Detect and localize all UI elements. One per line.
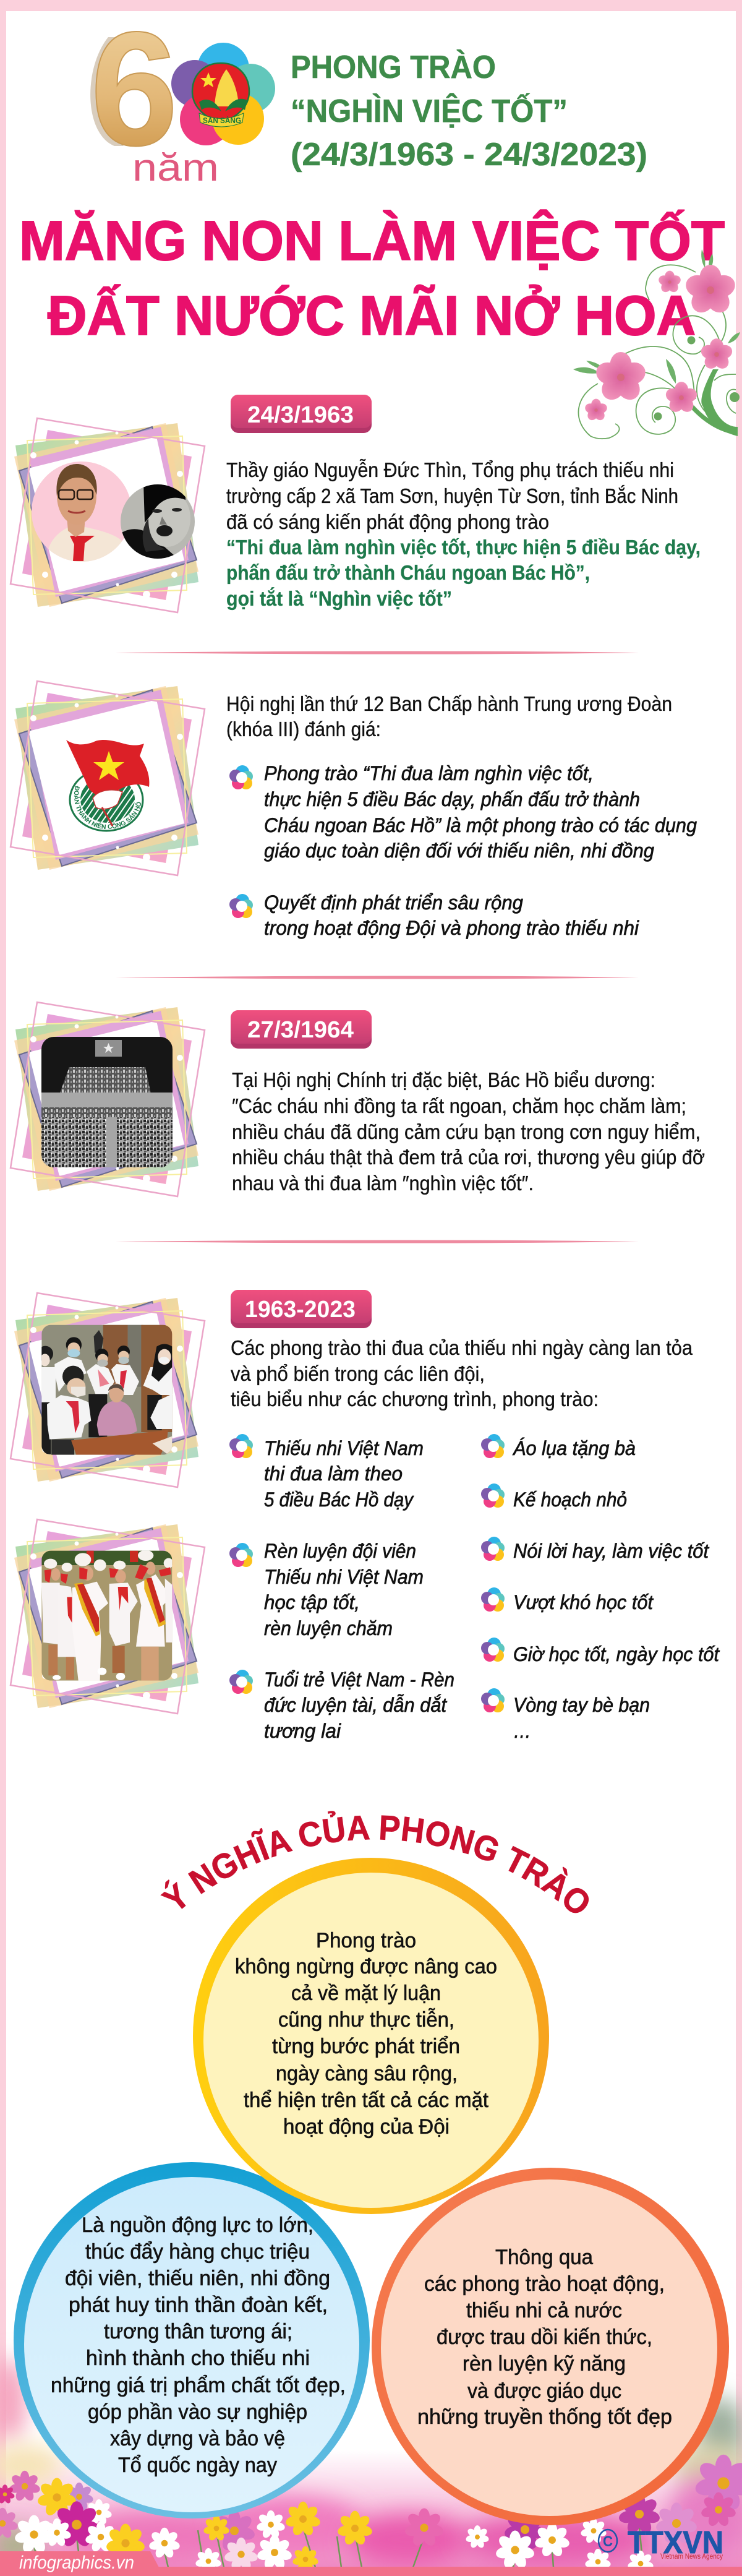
flower zero with badge [171, 43, 275, 145]
circle: yellow: thể hiện trên tất cả các mặt [244, 2089, 489, 2112]
circle: yellow: từng bước phát triển [272, 2035, 460, 2058]
list item: Rèn luyện đội viên: học tập tốt, [264, 1591, 360, 1613]
date badge [231, 1290, 372, 1328]
list item: Vòng tay bè bạn [481, 1688, 650, 1742]
date badge: 24/3/1963 [247, 402, 354, 428]
photo: pupils with elderly woman [11, 1293, 205, 1487]
intro text: và phổ biến trong các liên đội, [231, 1362, 485, 1385]
list item: Nói lời hay: Nói lời hay, làm việc tốt [513, 1540, 709, 1562]
circle: blue: phát huy tinh thần đoàn kết, [69, 2293, 328, 2317]
photo frame with union emblem [10, 680, 205, 876]
list item: Rèn luyện đội viên [229, 1540, 424, 1639]
circle: yellow: cũng như thực tiễn, [278, 2008, 454, 2032]
list item: Vòng tay bè bạn: Vòng tay bè bạn [513, 1694, 650, 1716]
text block: (khóa III) đánh giá: [226, 718, 381, 741]
text block: “Thi đua làm nghìn việc tốt, thực hiện 5 điều Bác dạy, [226, 536, 701, 559]
bullet one: Phong trào “Thi đua làm nghìn việc tốt, [264, 762, 594, 784]
circle: yellow: không ngừng được nâng cao [235, 1955, 497, 1978]
list item: Rèn luyện đội viên: Rèn luyện đội viên [264, 1540, 416, 1562]
list item: Vượt khó học tốt: Vượt khó học tốt [513, 1591, 654, 1613]
header title: “NGHÌN VIỆC TỐT” [291, 93, 568, 129]
list item: Giờ học tốt: Giờ học tốt, ngày học tốt [513, 1643, 720, 1665]
text block: phấn đấu trở thành Cháu ngoan Bác Hồ”, [226, 561, 590, 584]
circle: blue: Tổ quốc ngày nay [118, 2454, 277, 2477]
intro text [231, 1336, 693, 1410]
panel: 24/3/1963 [11, 395, 701, 612]
panel: 1963-2023 [11, 1290, 720, 1742]
circle: blue: tương thân tương ái; [104, 2320, 292, 2343]
list item: Tuổi trẻ Việt Nam: đức luyện tài, dẫn dắt [264, 1694, 447, 1716]
bullet one: Cháu ngoan Bác Hồ” là một phong trào có tác dụng [264, 814, 697, 836]
panel: Hội nghị lần thứ 12 [10, 680, 697, 939]
circle: orange: được trau dồi kiến thức, [437, 2325, 652, 2349]
circle: blue: đội viên, thiếu niên, nhi đồng [65, 2267, 330, 2290]
bullet two [229, 891, 639, 939]
main slogan: MĂNG NON LÀM VIỆC TỐT [19, 209, 725, 272]
text block: ″Các cháu nhi đồng ta rất ngoan, chăm học chăm làm; [232, 1094, 686, 1117]
TTXVN logo: Vietnam News Agency [660, 2552, 723, 2561]
text block: gọi tắt là “Nghìn việc tốt” [226, 587, 452, 610]
flower field background [0, 2357, 742, 2576]
date badge [231, 1010, 372, 1049]
text block [226, 692, 672, 741]
section heading: Ý nghĩa của phong trào: Ý NGHĨA CỦA PHONG TRÀO [160, 1811, 589, 1913]
circle: orange: rèn luyện kỹ năng [463, 2352, 626, 2376]
bullet one: thực hiện 5 điều Bác dạy, phấn đấu trở thành [264, 788, 640, 810]
circle: blue [14, 2162, 370, 2518]
text block: nhiều cháu đã dũng cảm cứu bạn trong cơn nguy hiểm, [232, 1120, 701, 1143]
circle: yellow: hoạt động của Đội [283, 2115, 450, 2139]
list item: Kế hoạch nhỏ [481, 1483, 627, 1511]
footer bar: infographics.vn [19, 2552, 134, 2573]
list item: Tuổi trẻ Việt Nam: tương lai [264, 1720, 341, 1742]
text block: Tại Hội nghị Chính trị đặc biệt, Bác Hồ biểu dương: [232, 1068, 655, 1091]
list item: Rèn luyện đội viên: rèn luyện chăm [264, 1617, 393, 1639]
floral decoration [573, 249, 740, 439]
circle: blue: xây dựng và bảo vệ [110, 2427, 285, 2450]
circle: yellow: cả về mặt lý luận [291, 1981, 441, 2005]
text block: trường cấp 2 xã Tam Sơn, huyện Từ Sơn, tỉnh Bắc Ninh [226, 484, 678, 507]
panel: 27/3/1964 [11, 1002, 705, 1196]
footer bar [0, 2551, 742, 2576]
photo: conference hall [11, 1002, 205, 1196]
circle: blue: hình thành cho thiếu nhi [86, 2346, 310, 2370]
main slogan: ĐẤT NƯỚC MÃI NỞ HOA [48, 284, 696, 347]
text block: Thầy giáo Nguyễn Đức Thìn, Tổng phụ trách thiếu nhi [226, 458, 674, 481]
list item: Rèn luyện đội viên: Thiếu nhi Việt Nam [264, 1566, 424, 1588]
text block [226, 458, 701, 610]
header title: (24/3/1963 - 24/3/2023) [291, 137, 647, 173]
circle: blue: góp phần vào sự nghiệp [88, 2400, 307, 2424]
flower zero with badge: SẴN SÀNG [203, 116, 241, 125]
circle: yellow: Phong trào [316, 1929, 416, 1952]
numeral six: 6 [90, 0, 178, 179]
header title: PHONG TRÀO [291, 49, 496, 85]
list item: Thiếu nhi Việt Nam [229, 1434, 424, 1511]
main slogan [19, 209, 725, 347]
date badge: 1963-2023 [245, 1297, 356, 1323]
date badge: 27/3/1964 [247, 1017, 354, 1043]
circle: orange: và được giáo dục [467, 2379, 621, 2403]
list item: Tuổi trẻ Việt Nam: Tuổi trẻ Việt Nam - Rèn [264, 1668, 454, 1691]
text block: Hội nghị lần thứ 12 Ban Chấp hành Trung ương Đoàn [226, 692, 672, 715]
list item: Áo lụa tặng bà: Áo lụa tặng bà [512, 1437, 636, 1459]
bullet two: trong hoạt động Đội và phong trào thiếu nhi [264, 917, 639, 939]
logo: 60 years [90, 0, 275, 189]
circle: blue: những giá trị phẩm chất tốt đẹp, [51, 2374, 346, 2397]
list item: Kế hoạch nhỏ: Kế hoạch nhỏ [513, 1488, 627, 1511]
bullet one: giáo dục toàn diện đối với thiếu niên, nhi đồng [264, 839, 654, 862]
list item: Áo lụa tặng bà [481, 1434, 636, 1459]
photo frame with union emblem: ĐOÀN THANH NIÊN CỘNG SẢN HỒ CHÍ MINH [74, 786, 141, 829]
list item: Vượt khó học tốt [481, 1587, 654, 1613]
circle: yellow: ngày càng sâu rộng, [276, 2062, 458, 2085]
text block: đã có sáng kiến phát động phong trào [226, 510, 549, 533]
circle: blue: Là nguồn động lực to lớn, [82, 2213, 313, 2237]
year word: năm [132, 147, 219, 189]
intro text: Các phong trào thi đua của thiếu nhi ngày càng lan tỏa [231, 1336, 693, 1359]
bullet two: Quyết định phát triển sâu rộng [264, 891, 523, 914]
list item: Vòng tay bè bạn: … [513, 1720, 531, 1742]
circle: orange: thiếu nhi cả nước [466, 2299, 622, 2322]
circle: orange: những truyền thống tốt đẹp [417, 2405, 672, 2429]
TTXVN logo: TTXVN [628, 2525, 723, 2560]
photo: parade pupils [11, 1519, 205, 1714]
photo frame with portraits [11, 418, 205, 612]
list item: Tuổi trẻ Việt Nam [229, 1668, 454, 1742]
text block [232, 1068, 705, 1195]
circle: orange: Thông qua [495, 2246, 593, 2269]
circle: orange: các phong trào hoạt động, [424, 2272, 665, 2296]
list item: Thiếu nhi Việt Nam: Thiếu nhi Việt Nam [264, 1437, 424, 1459]
circle: orange [372, 2168, 729, 2525]
circle: yellow [193, 1858, 549, 2214]
bullet one [229, 762, 697, 862]
header title [291, 49, 647, 173]
list item: Thiếu nhi Việt Nam: 5 điều Bác Hồ dạy [264, 1488, 414, 1511]
list item: Giờ học tốt [481, 1638, 720, 1665]
circle: blue: thúc đẩy hàng chục triệu [85, 2240, 310, 2264]
text block: nhau và thi đua làm ″nghìn việc tốt″. [232, 1172, 534, 1195]
TTXVN logo: C [603, 2533, 613, 2550]
list item: Thiếu nhi Việt Nam: thi đua làm theo [264, 1462, 403, 1485]
intro text: tiêu biểu như các chương trình, phong trào: [231, 1388, 599, 1410]
text block: nhiều cháu thật thà đem trả của rơi, thương yêu giúp đỡ [232, 1146, 705, 1169]
date badge [231, 395, 372, 433]
